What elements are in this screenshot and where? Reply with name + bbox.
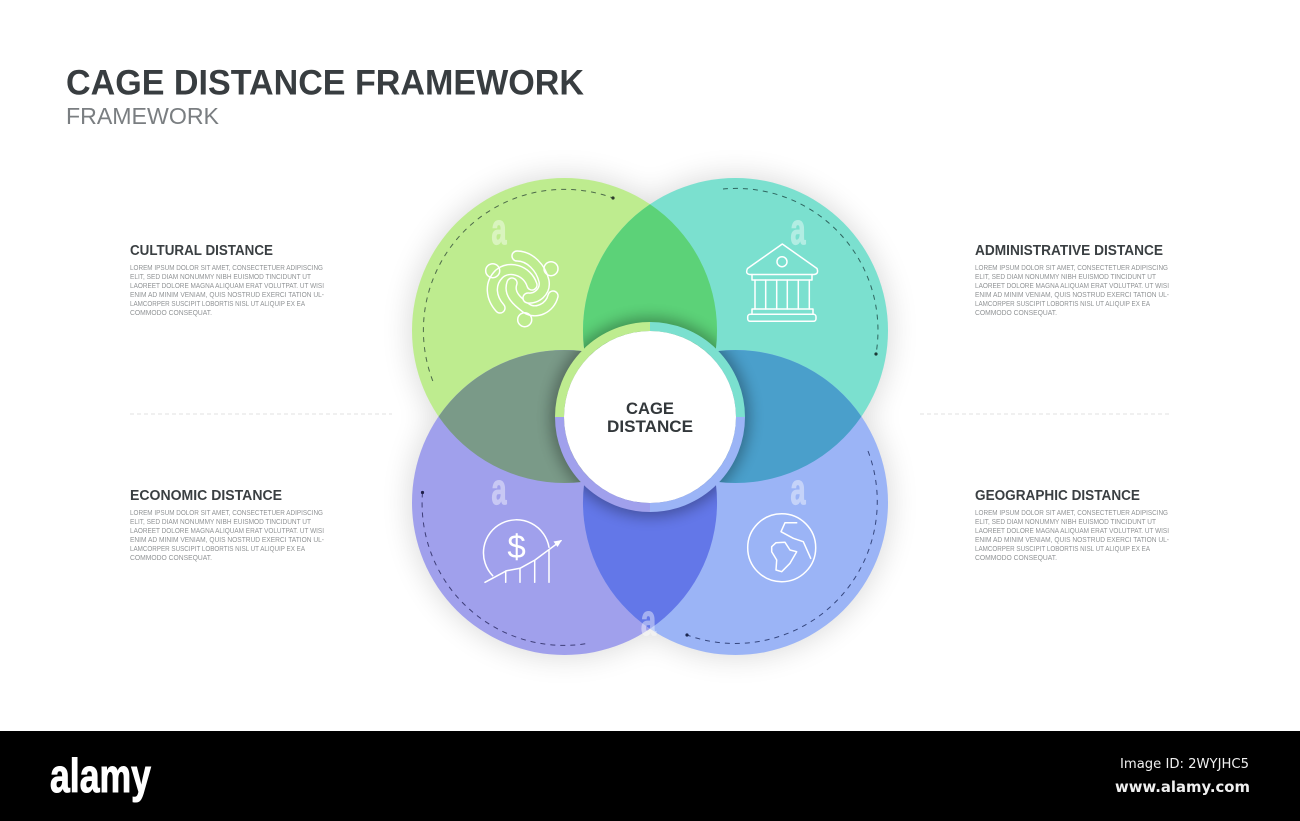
panel: cultural distance — [130, 243, 325, 317]
body text: administrative distance: ENIM AD MINIM VENIAM, QUIS NOSTRUD EXERCI TATION UL- — [975, 292, 1170, 299]
body text: administrative distance: LAMCORPER SUSCIPIT LOBORTIS NISL UT ALIQUIP EX EA — [975, 301, 1150, 308]
dashed arrow: economic — [421, 491, 590, 645]
body text: cultural distance: LOREM IPSUM DOLOR SIT AMET, CONSECTETUER ADIPISCING — [130, 265, 323, 272]
center label: CAGE — [626, 399, 674, 418]
watermark letters: a — [790, 205, 806, 254]
icon: people swirl — [486, 256, 558, 327]
heading: geographic distance: GEOGRAPHIC DISTANCE — [975, 488, 1140, 504]
watermark letters: a — [492, 465, 507, 514]
body text: economic distance: ENIM AD MINIM VENIAM, QUIS NOSTRUD EXERCI TATION UL- — [130, 537, 325, 544]
watermark letters: a — [492, 205, 507, 254]
center label — [607, 399, 693, 436]
body text: cultural distance: ELIT, SED DIAM NONUMMY NIBH EUISMOD TINCIDUNT UT — [130, 274, 312, 281]
dashed arrow: administrative — [723, 188, 878, 356]
body text: geographic distance: COMMODO CONSEQUAT. — [975, 555, 1057, 562]
body text: administrative distance: ELIT, SED DIAM NONUMMY NIBH EUISMOD TINCIDUNT UT — [975, 274, 1157, 281]
watermark letters: a — [641, 596, 656, 645]
center label: DISTANCE — [607, 417, 693, 436]
body text: geographic distance: LAMCORPER SUSCIPIT LOBORTIS NISL UT ALIQUIP EX EA — [975, 546, 1150, 553]
body text: economic distance: COMMODO CONSEQUAT. — [130, 555, 212, 562]
icon: dollar growth chart: $ — [507, 528, 526, 565]
body text: administrative distance: LOREM IPSUM DOLOR SIT AMET, CONSECTETUER ADIPISCING — [975, 265, 1168, 272]
overlap: left lens — [439, 350, 690, 483]
circle: economic — [412, 350, 717, 655]
circle: administrative — [583, 178, 888, 483]
body text: economic distance: ELIT, SED DIAM NONUMMY NIBH EUISMOD TINCIDUNT UT — [130, 519, 312, 526]
body text: economic distance: LOREM IPSUM DOLOR SIT AMET, CONSECTETUER ADIPISCING — [130, 510, 323, 517]
body text: cultural distance: COMMODO CONSEQUAT. — [130, 310, 212, 317]
panel: geographic distance — [975, 488, 1170, 562]
body text: geographic distance: ENIM AD MINIM VENIAM, QUIS NOSTRUD EXERCI TATION UL- — [975, 537, 1170, 544]
watermark letters — [492, 205, 806, 645]
footer url: www.alamy.com — [1115, 778, 1250, 796]
panel: economic distance — [130, 488, 325, 562]
body text: administrative distance — [975, 265, 1170, 317]
body text: geographic distance: ELIT, SED DIAM NONUMMY NIBH EUISMOD TINCIDUNT UT — [975, 519, 1157, 526]
venn diagram — [410, 176, 890, 656]
body text: economic distance — [130, 510, 325, 562]
title: CAGE DISTANCE FRAMEWORK — [66, 64, 584, 102]
body text: economic distance: LAOREET DOLORE MAGNA ALIQUAM ERAT VOLUTPAT. UT WISI — [130, 528, 324, 535]
body text: geographic distance: LOREM IPSUM DOLOR SIT AMET, CONSECTETUER ADIPISCING — [975, 510, 1168, 517]
subtitle: FRAMEWORK — [66, 103, 220, 129]
center ring — [560, 326, 740, 508]
center circle — [564, 331, 736, 503]
overlap: right lens — [610, 350, 861, 483]
body text: economic distance: LAMCORPER SUSCIPIT LOBORTIS NISL UT ALIQUIP EX EA — [130, 546, 305, 553]
footer bar — [0, 731, 1300, 821]
icon: dollar growth chart — [483, 520, 562, 582]
dashed arrow: cultural — [423, 189, 615, 381]
body text: geographic distance — [975, 510, 1170, 562]
body text: administrative distance: LAOREET DOLORE MAGNA ALIQUAM ERAT VOLUTPAT. UT WISI — [975, 283, 1169, 290]
footer logo: alamy — [50, 749, 151, 802]
icon: bank building — [747, 244, 818, 321]
circle: cultural — [412, 178, 717, 483]
body text: cultural distance: LAOREET DOLORE MAGNA ALIQUAM ERAT VOLUTPAT. UT WISI — [130, 283, 324, 290]
icon: globe — [748, 514, 816, 582]
overlap: top lens — [583, 204, 717, 457]
body text: geographic distance: LAOREET DOLORE MAGNA ALIQUAM ERAT VOLUTPAT. UT WISI — [975, 528, 1169, 535]
body text: administrative distance: COMMODO CONSEQUAT. — [975, 310, 1057, 317]
panel: administrative distance — [975, 243, 1170, 317]
body text: cultural distance: LAMCORPER SUSCIPIT LOBORTIS NISL UT ALIQUIP EX EA — [130, 301, 305, 308]
heading: cultural distance: CULTURAL DISTANCE — [130, 243, 273, 259]
footer image id: Image ID: 2WYJHC5 — [1120, 756, 1249, 772]
dashed arrow: geographic — [685, 451, 877, 643]
heading: administrative distance: ADMINISTRATIVE DISTANCE — [975, 243, 1163, 259]
body text: cultural distance: ENIM AD MINIM VENIAM, QUIS NOSTRUD EXERCI TATION UL- — [130, 292, 325, 299]
overlap: bottom lens — [583, 376, 717, 629]
watermark letters: a — [790, 465, 806, 514]
body text: cultural distance — [130, 265, 325, 317]
heading: economic distance: ECONOMIC DISTANCE — [130, 488, 282, 504]
circle: geographic — [583, 350, 888, 655]
